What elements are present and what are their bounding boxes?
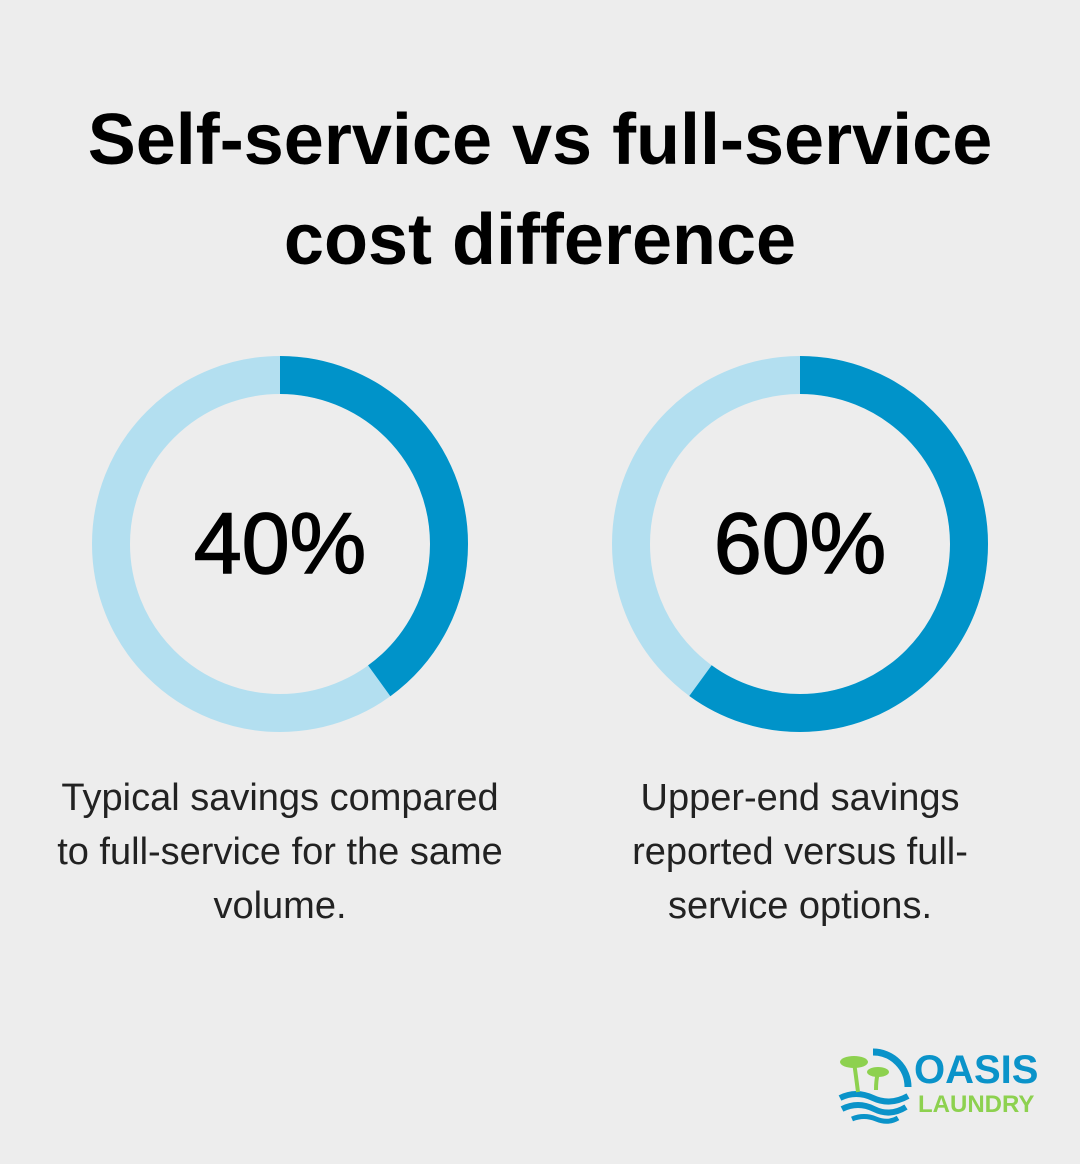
caption right: reported versus full-: [632, 831, 968, 873]
caption left: to full-service for the same: [57, 831, 503, 873]
donut: 40%: [92, 356, 468, 732]
logo: OASIS: [914, 1048, 1038, 1092]
title: [88, 100, 992, 280]
title: cost difference: [284, 200, 796, 280]
caption left: [57, 777, 503, 927]
caption right: Upper-end savings: [641, 777, 959, 819]
caption left: volume.: [213, 885, 347, 927]
donut: 60%: 60%: [714, 496, 886, 592]
logo: LAUNDRY: [918, 1091, 1034, 1118]
donut: 40%: 40%: [194, 496, 366, 592]
caption right: [632, 777, 968, 927]
donut: 60%: [612, 356, 988, 732]
caption left: Typical savings compared: [61, 777, 499, 819]
logo: [838, 1048, 1038, 1124]
title: Self-service vs full-service: [88, 100, 992, 180]
caption right: service options.: [668, 885, 932, 927]
icon: palm and waves: [838, 1048, 912, 1124]
